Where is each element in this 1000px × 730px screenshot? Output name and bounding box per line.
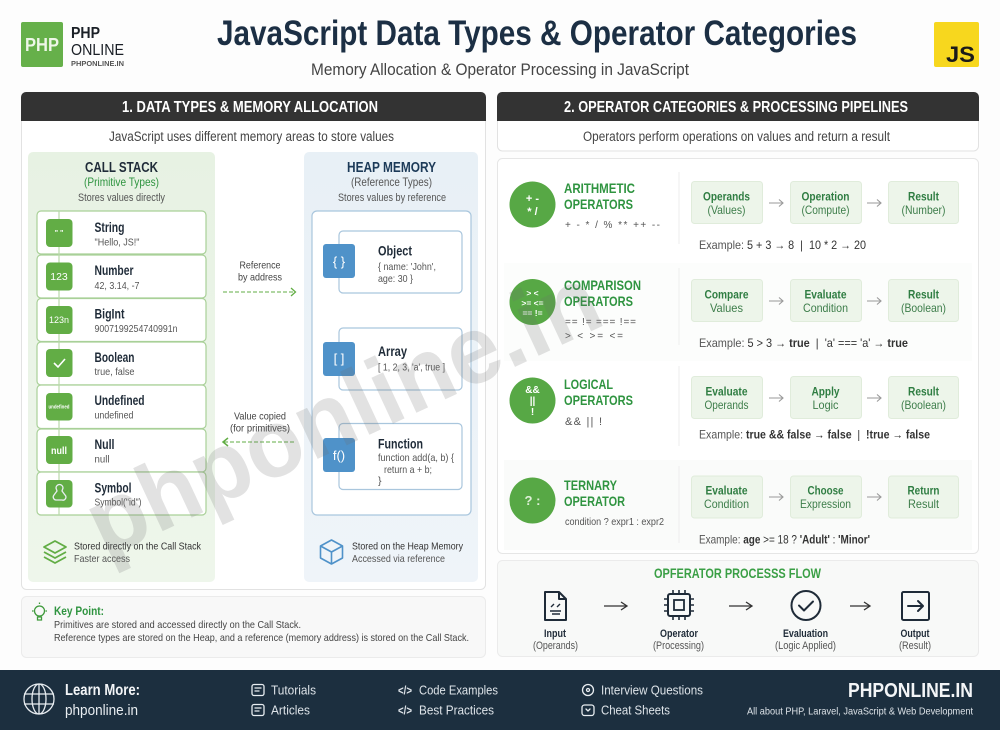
comparison title: COMPARISON bbox=[564, 277, 641, 293]
ternary title bbox=[564, 477, 664, 528]
arrow: reference by address: by address bbox=[238, 272, 282, 284]
icon: comparison: == != bbox=[522, 308, 543, 318]
pipeline: logical: (Boolean) bbox=[901, 398, 946, 412]
ternary title: OPERATOR bbox=[564, 493, 625, 509]
row: Symbol: Symbol("id") bbox=[94, 496, 142, 508]
heap note: Accessed via reference bbox=[352, 553, 445, 565]
pipeline: arithmetic bbox=[692, 182, 958, 224]
pipeline: comparison: Compare bbox=[704, 288, 749, 302]
example: logical: Example: true && false → false | !true → false bbox=[699, 428, 930, 442]
icon: globe bbox=[24, 684, 54, 714]
logo: PHP Online: PHP bbox=[25, 35, 59, 55]
card: Array: Array bbox=[378, 344, 407, 359]
panel: operator categories heading bbox=[497, 92, 979, 151]
link: tutorials bbox=[252, 682, 316, 698]
key point text bbox=[54, 604, 469, 644]
logical title bbox=[564, 376, 633, 428]
row: BigInt: 123n bbox=[49, 315, 69, 326]
step: output: (Result) bbox=[899, 640, 931, 652]
card: Function bbox=[323, 424, 462, 490]
pipeline: logical: Logic bbox=[812, 398, 838, 412]
row: BigInt: 9007199254740991n bbox=[94, 323, 178, 335]
logo: PHP Online: PHP bbox=[71, 25, 100, 42]
pipeline: ternary: Return bbox=[908, 484, 940, 498]
heap heading: HEAP MEMORY bbox=[347, 160, 436, 176]
icon: ternary bbox=[510, 478, 556, 524]
example: comparison: Example: 5 > 3 → true | 'a' === 'a' → true bbox=[699, 336, 908, 350]
link: cheat sheets: Cheat Sheets bbox=[601, 702, 670, 718]
pipeline: logical: Operands bbox=[704, 398, 748, 412]
row: Null bbox=[46, 436, 114, 466]
step: evaluation: Evaluation bbox=[783, 628, 828, 640]
title: JavaScript Data Types & Operator Categories bbox=[217, 14, 857, 53]
row: Number: 123 bbox=[50, 271, 68, 283]
icon: layers bbox=[44, 541, 66, 563]
icon: arithmetic bbox=[510, 182, 556, 228]
key point text: Reference types are stored on the Heap, and a reference (memory address) is stored on the Call Stack. bbox=[54, 632, 469, 644]
pipeline: comparison: (Boolean) bbox=[901, 301, 946, 315]
step: input bbox=[533, 592, 578, 652]
link: articles bbox=[252, 702, 310, 718]
pipeline: arithmetic: Result bbox=[908, 190, 939, 204]
call stack heading: (Primitive Types) bbox=[84, 175, 159, 189]
row: BigInt: BigInt bbox=[94, 306, 125, 322]
row: Symbol: Symbol bbox=[94, 480, 132, 496]
panel: data types and memory allocation bbox=[21, 92, 486, 590]
card: Object bbox=[323, 231, 462, 293]
card: Function: function add(a, b) { bbox=[378, 452, 454, 464]
learn more: phponline.in bbox=[65, 702, 138, 719]
primitive rows bbox=[37, 211, 206, 515]
arrow bbox=[850, 602, 870, 610]
pipeline: ternary: Choose bbox=[808, 484, 844, 498]
row: String bbox=[46, 219, 140, 248]
row: String: "Hello, JS!" bbox=[94, 236, 140, 248]
row: Undefined: undefined bbox=[94, 410, 134, 422]
arrow: reference by address bbox=[223, 260, 296, 296]
footer brand: PHPONLINE.IN bbox=[848, 680, 973, 702]
step: input: Input bbox=[544, 628, 566, 640]
icon: comparison: >= <= bbox=[521, 298, 544, 308]
logical title: && || ! bbox=[565, 416, 602, 428]
pipeline: logical: Evaluate bbox=[706, 384, 748, 398]
row: Number: 42, 3.14, -7 bbox=[94, 280, 140, 292]
pipeline: ternary: Result bbox=[908, 497, 940, 511]
card: Array bbox=[323, 328, 462, 390]
link: interview questions: Interview Questions bbox=[601, 682, 703, 698]
row: arithmetic operators bbox=[510, 172, 958, 252]
arithmetic title bbox=[564, 180, 660, 231]
row: Number bbox=[46, 262, 140, 292]
icon: logical bbox=[510, 378, 556, 424]
step: evaluation bbox=[775, 591, 836, 652]
icon: arithmetic: + - bbox=[526, 193, 539, 205]
pipeline: arithmetic: Operands bbox=[703, 190, 750, 204]
step: output bbox=[899, 592, 931, 652]
row: String: " " bbox=[55, 230, 63, 237]
pipeline: arithmetic: (Number) bbox=[902, 203, 946, 217]
pipeline: logical bbox=[692, 376, 958, 418]
comparison title bbox=[564, 277, 641, 342]
arrow bbox=[604, 602, 627, 610]
call stack heading: CALL STACK bbox=[85, 160, 158, 176]
call stack note bbox=[74, 540, 202, 565]
link: code examples: </> bbox=[398, 686, 412, 698]
row: Number: Number bbox=[94, 263, 134, 278]
row: Null: null bbox=[51, 445, 67, 457]
icon: JS logo bbox=[934, 22, 979, 67]
pipeline: ternary: Condition bbox=[704, 497, 749, 511]
step: operator bbox=[653, 590, 704, 652]
icon: logical: || bbox=[530, 396, 535, 407]
panel: operator categories heading: Operators perform operations on values and return a result bbox=[583, 129, 890, 144]
pipeline: comparison: Values bbox=[710, 301, 743, 315]
learn more bbox=[65, 682, 140, 719]
heap note bbox=[352, 540, 464, 565]
icon: light bulb bbox=[32, 602, 47, 620]
icon: ternary: ? : bbox=[525, 493, 540, 508]
call stack heading: Stores values directly bbox=[78, 192, 165, 204]
card: Object: age: 30 } bbox=[378, 273, 413, 285]
panel intro text: JavaScript uses different memory areas to store values bbox=[109, 129, 394, 144]
arrow: reference by address: Reference bbox=[240, 260, 281, 272]
step: operator: (Processing) bbox=[653, 640, 704, 652]
heap memory column bbox=[304, 152, 478, 582]
key point text: Primitives are stored and accessed directly on the Call Stack. bbox=[54, 619, 301, 631]
comparison title: OPERATORS bbox=[564, 293, 633, 309]
example: ternary: Example: age >= 18 ? 'Adult' : 'Minor' bbox=[699, 532, 870, 546]
row: Boolean bbox=[46, 349, 135, 378]
heap heading: Stores values by reference bbox=[338, 192, 446, 204]
step: operator: Operator bbox=[660, 628, 699, 640]
call stack heading bbox=[78, 160, 165, 204]
card: Function: f() bbox=[333, 448, 345, 463]
arrow: value copied bbox=[223, 410, 296, 446]
example: arithmetic: Example: 5 + 3 → 8 | 10 * 2 → 20 bbox=[699, 238, 866, 252]
call stack note: Stored directly on the Call Stack bbox=[74, 540, 202, 552]
logo: PHP Online: ONLINE bbox=[71, 42, 124, 59]
row: Undefined bbox=[46, 393, 144, 422]
row: Boolean: Boolean bbox=[94, 350, 134, 365]
logical title: LOGICAL bbox=[564, 376, 613, 392]
icon: comparison bbox=[510, 279, 556, 325]
call stack column bbox=[28, 152, 215, 582]
pipeline: comparison: Evaluate bbox=[804, 288, 847, 302]
row: BigInt bbox=[46, 306, 178, 335]
row: Symbol bbox=[46, 480, 142, 508]
pipeline: arithmetic: (Compute) bbox=[802, 203, 850, 217]
heap heading bbox=[338, 160, 446, 204]
row: Null: null bbox=[94, 454, 110, 466]
panel: key point bbox=[22, 596, 486, 658]
footer brand: All about PHP, Laravel, JavaScript & Web Development bbox=[747, 706, 973, 718]
row: Boolean: true, false bbox=[94, 366, 135, 378]
arithmetic title: OPERATORS bbox=[564, 196, 633, 212]
row: logical operators bbox=[510, 366, 958, 446]
pipeline: arithmetic: (Values) bbox=[708, 203, 746, 217]
logical title: OPERATORS bbox=[564, 392, 633, 408]
icon: logical: && bbox=[525, 385, 540, 396]
pipeline: comparison: Condition bbox=[803, 301, 848, 315]
panel: operator categories heading: 2. OPERATOR CATEGORIES & PROCESSING PIPELINES bbox=[564, 99, 908, 116]
link: code examples: Code Examples bbox=[419, 682, 498, 698]
card: Function: } bbox=[378, 475, 382, 487]
heap note: Stored on the Heap Memory bbox=[352, 540, 464, 552]
row: Null: Null bbox=[94, 437, 114, 452]
pipeline: ternary: Expression bbox=[800, 497, 851, 511]
link: articles: Articles bbox=[271, 702, 310, 718]
watermark: phponline.in bbox=[69, 246, 617, 577]
call stack note: Faster access bbox=[74, 553, 130, 565]
card: Array: [ 1, 2, 3, 'a', true ] bbox=[378, 362, 445, 374]
icon: JS logo: JS bbox=[946, 42, 975, 67]
ternary title: TERNARY bbox=[564, 477, 618, 493]
subtitle: Memory Allocation & Operator Processing in JavaScript bbox=[311, 61, 689, 79]
card: Object: { name: 'John', bbox=[378, 261, 436, 273]
pipeline: comparison bbox=[692, 280, 958, 322]
row: Undefined: Undefined bbox=[94, 393, 144, 408]
card: Object: { } bbox=[333, 254, 346, 269]
panel: operator process flow bbox=[498, 560, 978, 656]
icon: comparison: > < bbox=[526, 288, 539, 298]
panel heading 1: 1. DATA TYPES & MEMORY ALLOCATION bbox=[122, 99, 378, 116]
pipeline: logical: Result bbox=[908, 384, 939, 398]
footer bbox=[0, 670, 1000, 730]
row: Undefined: undefined bbox=[48, 404, 70, 410]
link: best practices: </> bbox=[398, 706, 412, 718]
card: Object: Object bbox=[378, 244, 412, 258]
pipeline: logical: Apply bbox=[812, 384, 840, 398]
card: Function: return a + b; bbox=[384, 464, 432, 476]
logo: PHP Online: PHPONLINE.IN bbox=[71, 61, 124, 68]
flow heading: OPFERATOR PROCESSS FLOW bbox=[654, 565, 822, 581]
icon: arithmetic: * / bbox=[527, 206, 538, 218]
panel: operators bbox=[498, 158, 978, 554]
panel heading 1 bbox=[21, 92, 486, 121]
step: evaluation: (Logic Applied) bbox=[775, 640, 836, 652]
card: Array: [ ] bbox=[334, 351, 344, 366]
card: Function: Function bbox=[378, 436, 423, 452]
pipeline: ternary: Evaluate bbox=[706, 484, 748, 498]
row: String: String bbox=[94, 220, 124, 235]
arithmetic title: ARITHMETIC bbox=[564, 180, 635, 196]
footer brand bbox=[747, 680, 973, 718]
ternary title: condition ? expr1 : expr2 bbox=[565, 516, 664, 528]
step: output: Output bbox=[900, 628, 930, 640]
icon: logical: ! bbox=[531, 407, 534, 418]
step: input: (Operands) bbox=[533, 640, 578, 652]
row: comparison operators bbox=[510, 268, 958, 350]
comparison title: == != === !== bbox=[565, 317, 636, 328]
arithmetic title: + - * / % ** ++ -- bbox=[565, 220, 660, 231]
pipeline: comparison: Result bbox=[908, 288, 939, 302]
arrow: value copied: Value copied bbox=[234, 410, 286, 422]
key point text: Key Point: bbox=[54, 604, 104, 618]
link: best practices: Best Practices bbox=[419, 702, 494, 718]
comparison title: > < >= <= bbox=[565, 331, 623, 342]
arrow: value copied: (for primitives) bbox=[230, 422, 290, 434]
learn more: Learn More: bbox=[65, 682, 140, 699]
arrow bbox=[729, 602, 752, 610]
pipeline: ternary bbox=[692, 476, 958, 518]
logo: PHP Online bbox=[21, 22, 124, 68]
heap heading: (Reference Types) bbox=[351, 175, 432, 189]
icon: cube bbox=[320, 540, 342, 564]
row: ternary operator bbox=[510, 466, 958, 546]
link: tutorials: Tutorials bbox=[271, 682, 316, 698]
pipeline: arithmetic: Operation bbox=[802, 190, 850, 204]
